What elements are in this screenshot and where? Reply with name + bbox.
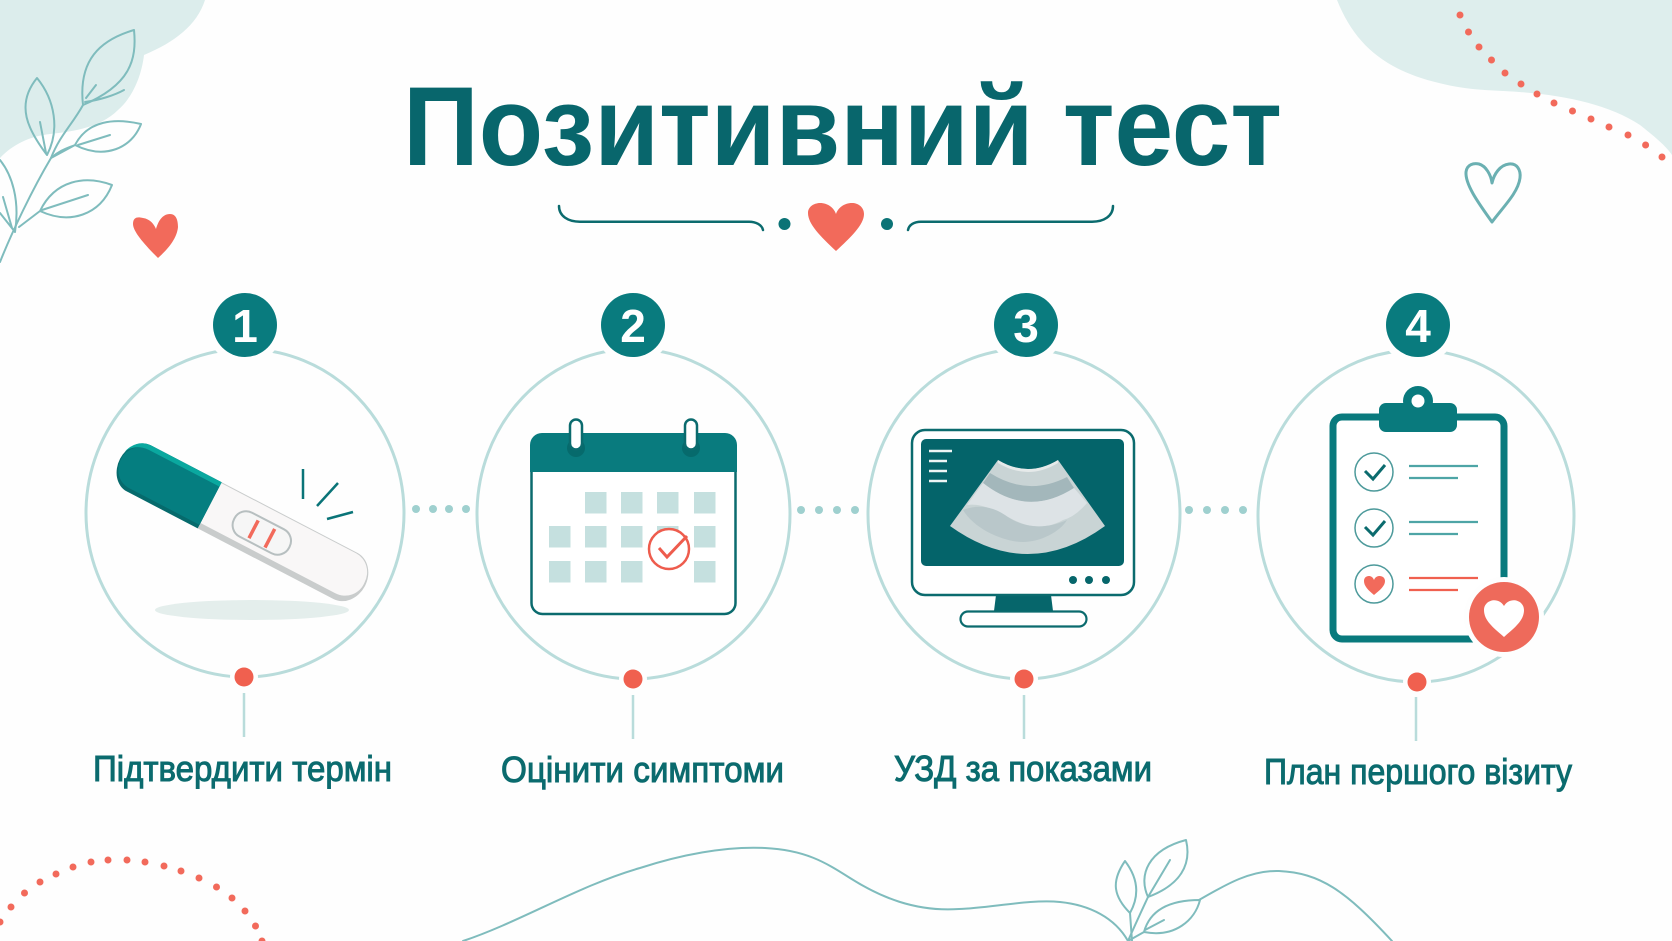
background blob: top right <box>1337 0 1672 155</box>
step 2 red dot and stem <box>619 665 647 739</box>
background blob: top left <box>0 0 205 158</box>
decoration: small red heart <box>133 214 178 258</box>
decoration: red dotted arc, bottom left <box>0 856 266 941</box>
decoration: outline heart <box>1466 164 1520 222</box>
step 3: ultrasound <box>868 286 1180 789</box>
step 3 number badge <box>987 286 1065 364</box>
step 4 number badge <box>1379 286 1457 364</box>
title: Позитивний тест <box>403 64 1282 189</box>
step 2: assess symptoms <box>477 286 790 790</box>
step 2 number badge <box>594 286 672 364</box>
step 4 red dot and stem <box>1403 668 1431 741</box>
step 4 ring <box>1258 350 1574 682</box>
step 3 ring <box>868 349 1180 679</box>
connector dots 3-4 <box>1185 506 1247 514</box>
connector dots 2-3 <box>797 506 859 514</box>
icon: ultrasound monitor <box>912 430 1134 626</box>
step 1 number badge: 1 <box>232 300 258 352</box>
step 3 red dot and stem <box>1010 665 1038 739</box>
title divider with heart <box>559 203 1113 251</box>
decoration: branch with leaves, top left <box>0 30 141 262</box>
icon: clipboard checklist <box>1333 386 1544 657</box>
step 2 number badge: 2 <box>620 300 646 352</box>
connector dots 1-2 <box>412 505 470 513</box>
step 3 label: УЗД за показами <box>894 748 1152 789</box>
step 1 label: Підтвердити термін <box>93 748 392 789</box>
step 4: first visit plan <box>1258 286 1574 792</box>
icon: pregnancy test <box>108 436 377 620</box>
step 4 number badge: 4 <box>1405 300 1431 352</box>
decoration: bottom wave with leaves <box>463 840 1392 941</box>
step 1 red dot and stem <box>230 663 258 737</box>
step 2 label: Оцінити симптоми <box>501 749 784 790</box>
step 1 ring <box>86 349 404 677</box>
step 4 label: План першого візиту <box>1264 751 1572 792</box>
decoration: red dotted arc, top right <box>1456 12 1666 160</box>
step 1: confirm term <box>86 286 404 789</box>
step 3 number badge: 3 <box>1013 300 1039 352</box>
step 2 ring <box>477 349 790 679</box>
icon: calendar <box>530 420 737 614</box>
step 1 number badge <box>206 286 284 364</box>
